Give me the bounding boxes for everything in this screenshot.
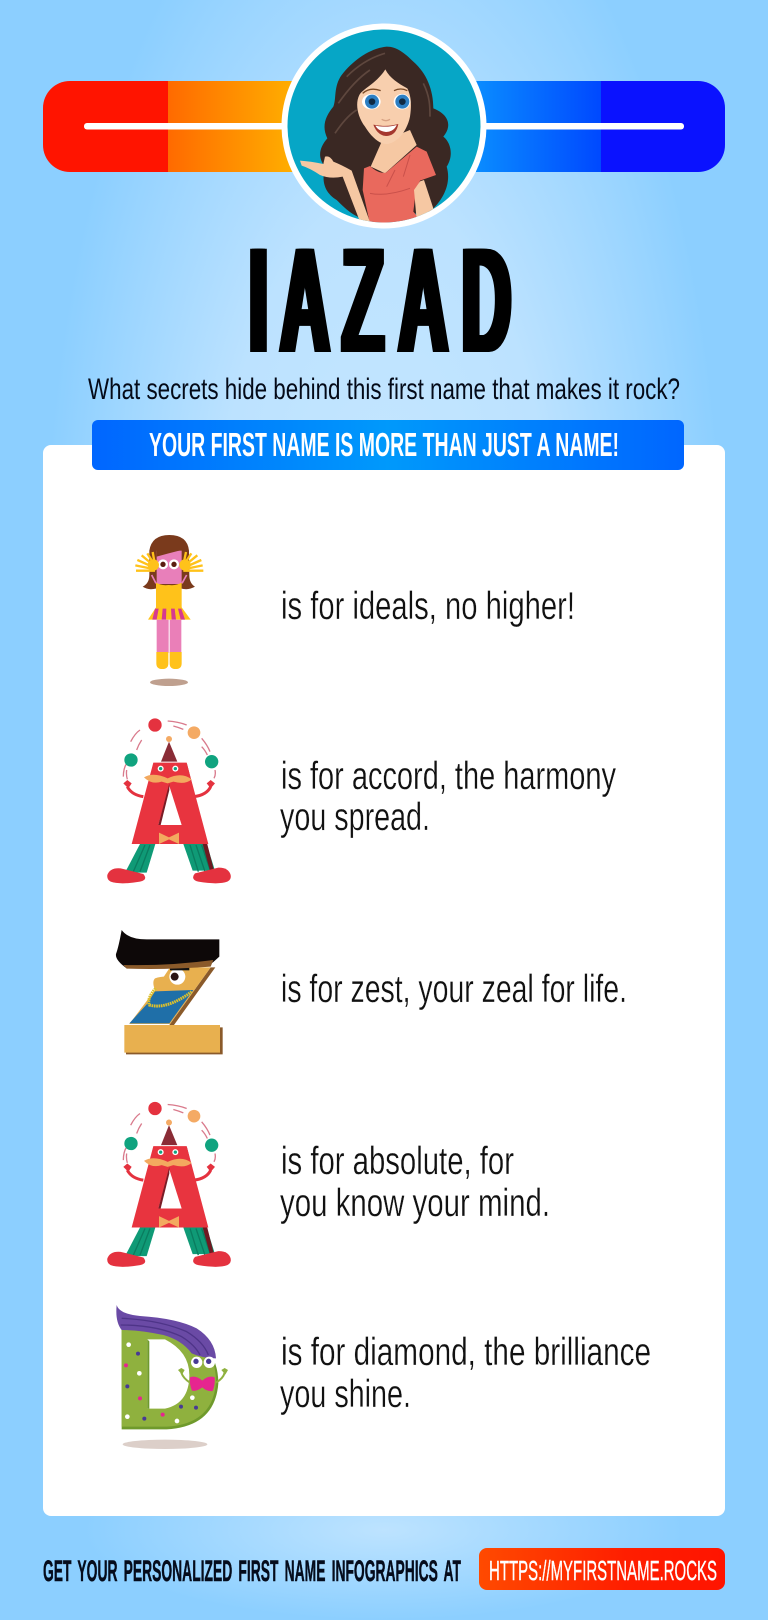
- icon: letter Z character: [116, 930, 223, 1054]
- shirt: [363, 147, 436, 224]
- text: I line: is for ideals, no higher!: [281, 585, 575, 628]
- text: first A lines: is for accord, the harmony: [281, 755, 616, 798]
- text: second A lines: is for absolute, for: [281, 1140, 514, 1183]
- eyes: [362, 94, 381, 109]
- text: second A lines: you know your mind.: [280, 1182, 550, 1225]
- arm: [414, 180, 433, 220]
- text: D lines: [280, 1331, 651, 1416]
- text: first A lines: you spread.: [280, 796, 430, 839]
- title: IAZAD: [249, 216, 511, 384]
- icon: second letter A juggler: [107, 1102, 231, 1267]
- icon: letter I cheerleader: [135, 535, 203, 686]
- banner: [92, 420, 684, 470]
- text: second A lines: [280, 1140, 550, 1225]
- text: first A lines: [280, 755, 616, 839]
- icon: letter A juggler: [107, 718, 231, 883]
- icon: letter D character: [116, 1305, 228, 1449]
- nose and mouth: [382, 119, 390, 121]
- footer link button: [479, 1548, 725, 1590]
- face: [357, 69, 411, 144]
- text: D lines: you shine.: [280, 1373, 411, 1416]
- text: Z line: is for zest, your zeal for life.: [281, 968, 627, 1011]
- eyebrows: [363, 89, 407, 93]
- header colour bar: [43, 81, 725, 172]
- text: D lines: is for diamond, the brilliance: [281, 1331, 651, 1374]
- portrait: woman in circle: [282, 24, 486, 228]
- neck: [371, 130, 417, 173]
- panel: white content card: [43, 445, 725, 1516]
- hair: [320, 47, 451, 220]
